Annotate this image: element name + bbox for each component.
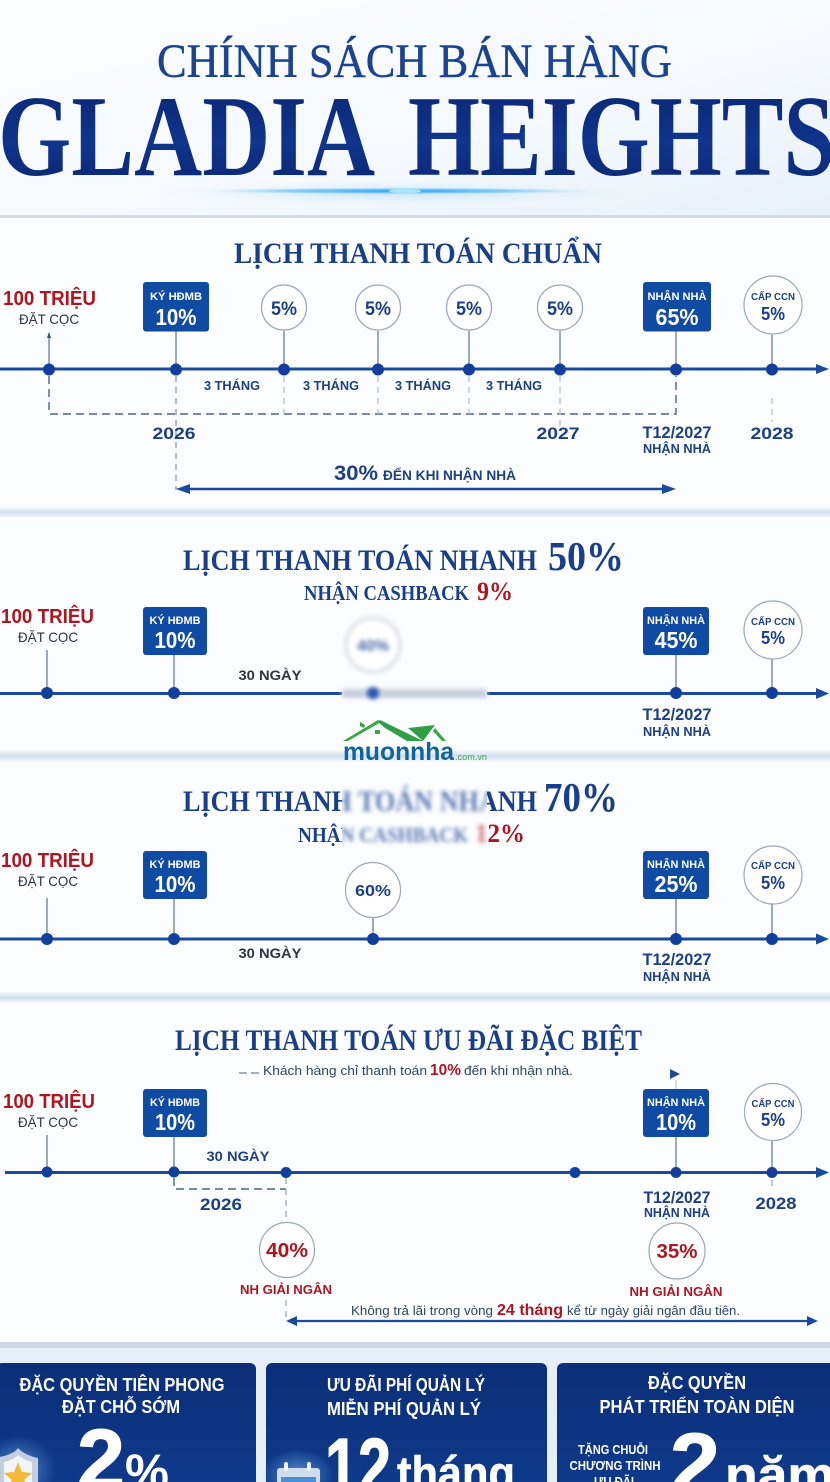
bank disbursement 35%: NH GIẢI NGÂN — [630, 1284, 722, 1299]
milestone: certificate 5%: CẤP CCN — [751, 290, 795, 303]
blurred 40% milestone: 40% — [357, 638, 389, 655]
interval labels: 3 THÁNG — [486, 378, 542, 393]
card: early booking privilege: ĐẶC QUYỀN TIÊN PHONG — [20, 1374, 224, 1395]
deposit label — [3, 1089, 95, 1130]
milestone: handover 10% — [643, 1089, 709, 1137]
milestone: handover 10%: NHẬN NHÀ — [647, 1096, 705, 1109]
icon: shield — [0, 1436, 56, 1482]
milestone: contract 10%: 10% — [154, 627, 196, 653]
milestone: certificate 5%: CẤP CCN — [751, 615, 795, 628]
callout: 30% until handover: ĐẾN KHI NHẬN NHÀ — [383, 468, 516, 483]
callout: 30% until handover: 30% — [334, 462, 378, 485]
deposit label: ĐẶT CỌC — [19, 311, 79, 327]
bank disbursement 35%: 35% — [656, 1241, 698, 1263]
milestone: certificate 5% — [744, 276, 802, 334]
interval labels — [204, 378, 542, 393]
card: comprehensive development privilege: PHÁT TRIỂN TOÀN DIỆN — [600, 1396, 794, 1417]
watermark logo: muonnha — [343, 738, 455, 766]
milestone: contract 10%: KÝ HĐMB — [150, 290, 202, 303]
interval labels: 3 THÁNG — [204, 378, 260, 393]
milestone: handover 25% — [643, 851, 709, 899]
milestone: handover 65% — [643, 282, 711, 332]
bank disbursement 35% — [630, 1223, 722, 1299]
milestone: certificate 5% — [744, 601, 802, 659]
timeline — [0, 331, 829, 490]
milestone: handover 45% — [643, 607, 709, 655]
heading: LỊCH THANH TOÁN NHANH — [183, 785, 537, 818]
handover date — [642, 950, 712, 984]
heading: LỊCH THANH TOÁN NHANH — [183, 785, 537, 818]
card: comprehensive development privilege: TẶNG CHUỖI — [578, 1442, 648, 1457]
card: comprehensive development privilege: ĐẶC QUYỀN — [648, 1372, 746, 1393]
heading: NHẬN CASHBACK — [298, 823, 469, 847]
milestone: certificate 5%: 5% — [761, 873, 785, 893]
heading: NHẬN CASHBACK — [304, 581, 470, 605]
heading: LỊCH THANH TOÁN CHUẨN — [234, 237, 602, 270]
callout: 24 months interest free — [286, 1302, 818, 1326]
milestone: handover 45%: 45% — [654, 627, 698, 653]
bank disbursement 40% — [240, 1222, 332, 1297]
milestones: 5% instalments: 5% — [547, 299, 573, 320]
note: đến khi nhận nhà. — [464, 1063, 573, 1078]
milestone: contract 10%: 10% — [155, 1109, 195, 1135]
card: management fee offer: MIỄN PHÍ QUẢN LÝ — [327, 1398, 481, 1419]
interval label: 30 NGÀY — [238, 668, 302, 683]
milestone: certificate 5% — [744, 846, 802, 904]
panel: fast payment 50% — [0, 533, 829, 739]
callout: 24 months interest free: kể từ ngày giải ngân đầu tiên. — [567, 1303, 740, 1318]
deposit label: 100 TRIỆU — [3, 286, 96, 310]
separators — [0, 506, 830, 1482]
note: Khách hàng chỉ thanh toán — [263, 1063, 427, 1078]
deposit label — [1, 848, 94, 889]
milestone: contract 10%: KÝ HĐMB — [150, 858, 201, 871]
callout: 24 months interest free: Không trả lãi trong vòng — [351, 1303, 493, 1318]
milestone: contract 10% — [143, 607, 207, 655]
panel: special offer schedule — [3, 1024, 829, 1326]
year labels: 2027 — [536, 424, 580, 443]
card: comprehensive development privilege — [557, 1363, 830, 1482]
milestone: handover 10%: 10% — [656, 1109, 696, 1135]
milestone: certificate 5%: 5% — [761, 628, 785, 648]
timeline — [0, 898, 829, 945]
milestone: contract 10%: 10% — [154, 871, 196, 897]
watermark logo: .com.vn — [455, 752, 487, 763]
milestone: contract 10%: KÝ HĐMB — [150, 614, 201, 627]
heading: LỊCH THANH TOÁN NHANH — [183, 544, 537, 577]
deposit label — [3, 286, 96, 327]
heading — [183, 782, 615, 846]
callout: 24 months interest free: 24 tháng — [497, 1302, 563, 1319]
panel: fast payment 70% — [0, 774, 829, 984]
deposit label: ĐẶT CỌC — [18, 629, 78, 645]
milestone: handover 65%: 65% — [656, 304, 698, 330]
heading: 70% — [544, 774, 618, 820]
milestones: 5% instalments: 5% — [271, 299, 297, 320]
year labels — [200, 1189, 796, 1220]
heading: NHẬN CASHBACK — [298, 823, 469, 847]
milestone: certificate 5%: CẤP CCN — [751, 859, 795, 872]
note — [239, 1062, 573, 1079]
blurred 40% milestone — [342, 618, 487, 701]
interval labels: 3 THÁNG — [395, 378, 451, 393]
header — [0, 0, 830, 218]
milestones: 5% instalments: 5% — [456, 299, 482, 320]
milestone: certificate 5% — [744, 1084, 802, 1140]
milestone: contract 10%: 10% — [156, 304, 196, 330]
year labels: 2026 — [200, 1196, 242, 1214]
deposit label: ĐẶT CỌC — [18, 1114, 78, 1130]
handover date: NHẬN NHÀ — [643, 969, 712, 984]
heading: LỊCH THANH TOÁN ƯU ĐÃI ĐẶC BIỆT — [175, 1024, 642, 1057]
timeline — [5, 1069, 829, 1322]
milestone: contract 10% — [143, 851, 207, 899]
milestone: handover 45%: NHẬN NHÀ — [647, 614, 705, 627]
deposit label: 100 TRIỆU — [3, 1089, 95, 1113]
year labels: T12/2027 — [644, 1189, 710, 1207]
milestones: 5% instalments — [262, 285, 582, 330]
year labels: 2026 — [152, 424, 196, 443]
watermark logo — [343, 720, 487, 766]
milestone: certificate 5%: CẤP CCN — [752, 1097, 794, 1110]
milestones: 5% instalments: 5% — [365, 299, 391, 320]
year labels: NHẬN NHÀ — [644, 1205, 711, 1220]
year labels: T12/2027 — [642, 423, 712, 442]
year labels — [152, 423, 794, 456]
title line 2: GLADIA — [0, 73, 375, 201]
title line 2 — [0, 73, 830, 201]
interval labels: 3 THÁNG — [303, 378, 359, 393]
heading: 50% — [548, 533, 624, 579]
milestone: handover 25%: NHẬN NHÀ — [647, 858, 705, 871]
title line 1: CHÍNH SÁCH BÁN HÀNG — [157, 35, 672, 88]
bank disbursement 40%: NH GIẢI NGÂN — [240, 1282, 332, 1297]
deposit label — [1, 604, 94, 645]
note: 10% — [430, 1062, 461, 1079]
milestone: handover 25%: 25% — [654, 871, 698, 897]
card: management fee offer: ƯU ĐÃI PHÍ QUẢN LÝ — [327, 1374, 485, 1395]
milestone: contract 10% — [143, 282, 209, 332]
card: early booking privilege: ĐẶT CHỖ SỚM — [62, 1396, 180, 1417]
handover date — [642, 705, 712, 739]
interval label: 30 NGÀY — [206, 1149, 270, 1164]
deposit label: 100 TRIỆU — [1, 604, 94, 628]
handover date: T12/2027 — [642, 950, 712, 969]
timeline — [0, 650, 829, 699]
deposit label: 100 TRIỆU — [1, 848, 94, 872]
card: management fee offer — [262, 1363, 547, 1482]
year labels: 2028 — [750, 424, 794, 443]
bank disbursement 40%: 40% — [266, 1240, 308, 1262]
deposit label: ĐẶT CỌC — [18, 873, 78, 889]
milestone: 60% — [346, 862, 400, 918]
card: early booking privilege — [0, 1363, 256, 1482]
handover date: T12/2027 — [642, 705, 712, 724]
panel: standard payment schedule — [0, 237, 829, 494]
milestone: certificate 5%: 5% — [761, 1110, 785, 1130]
milestone: handover 65%: NHẬN NHÀ — [648, 290, 707, 303]
card: comprehensive development privilege: CHƯƠNG TRÌNH — [570, 1458, 660, 1473]
handover date: NHẬN NHÀ — [643, 724, 712, 739]
milestone: 60%: 60% — [355, 883, 391, 900]
interval label: 30 NGÀY — [238, 946, 302, 961]
milestone: contract 10% — [143, 1089, 207, 1137]
year labels: NHẬN NHÀ — [643, 441, 712, 456]
heading: 9% — [477, 577, 513, 606]
heading — [183, 533, 624, 606]
year labels: 2028 — [756, 1195, 796, 1213]
callout: 30% until handover — [176, 462, 676, 494]
heading: 12% — [475, 819, 525, 848]
icon: calendar — [262, 1449, 334, 1482]
heading: 12% — [475, 819, 525, 848]
milestone: certificate 5%: 5% — [761, 304, 785, 324]
milestone: contract 10%: KÝ HĐMB — [150, 1096, 200, 1109]
